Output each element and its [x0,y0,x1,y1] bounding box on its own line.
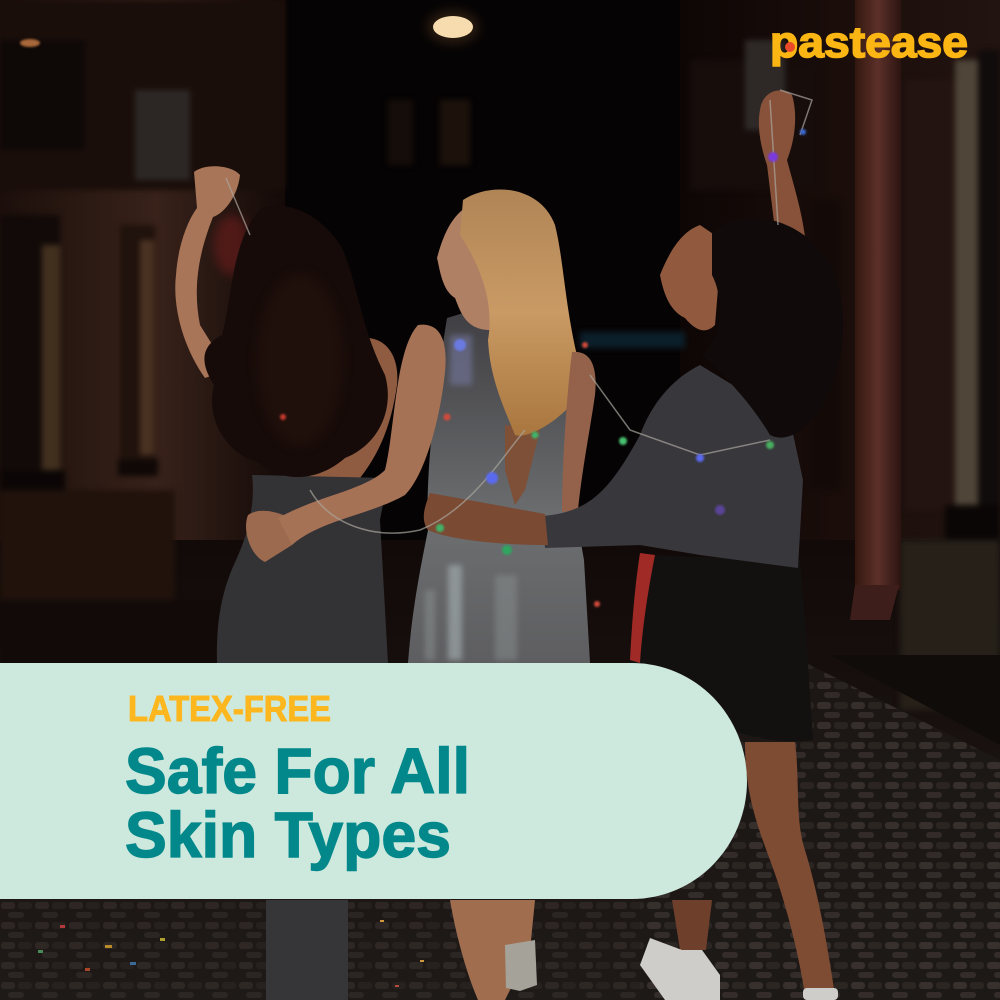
logo accent: red leaf [785,42,795,52]
sparkly dress [217,475,388,663]
heading: Safe For All Skin Types: Skin Types [125,799,451,871]
lower legs [745,742,835,995]
logo: pastease: pastease [770,18,968,67]
sequin highlights [425,335,517,660]
raised arm [175,166,240,378]
confetti on the ground [38,920,424,987]
face [660,225,722,330]
dress bottom below panel [266,900,348,1000]
legs below panel [450,900,535,1000]
heading: Safe For All Skin Types: Safe For All [125,735,470,807]
heading: Safe For All Skin Types [125,735,470,871]
panel: mint rounded banner [0,663,747,899]
sparkly grey top [543,365,803,568]
grey sneaker [505,940,537,991]
left arm around friend [278,325,446,545]
woman on the left [175,166,397,1000]
hand around waist [246,511,295,562]
open back [505,425,540,505]
woman in the middle [278,189,596,1000]
long curly dark hair [204,206,388,477]
woman on the right [424,90,843,1000]
arm on friend's back [424,493,548,545]
bare shoulder [300,338,397,480]
red stripe on skirt [630,553,655,663]
white sneakers [640,938,720,1000]
black skirt [630,555,813,741]
subheading: LATEX-FREE: LATEX-FREE [128,688,331,729]
raised arm [759,90,806,245]
blonde hair [460,189,585,436]
face and neck [437,205,500,330]
curly black hair [702,218,843,438]
right arm [562,352,596,512]
string lights [226,90,812,607]
silver dress [408,308,590,663]
street lamp [427,10,479,44]
